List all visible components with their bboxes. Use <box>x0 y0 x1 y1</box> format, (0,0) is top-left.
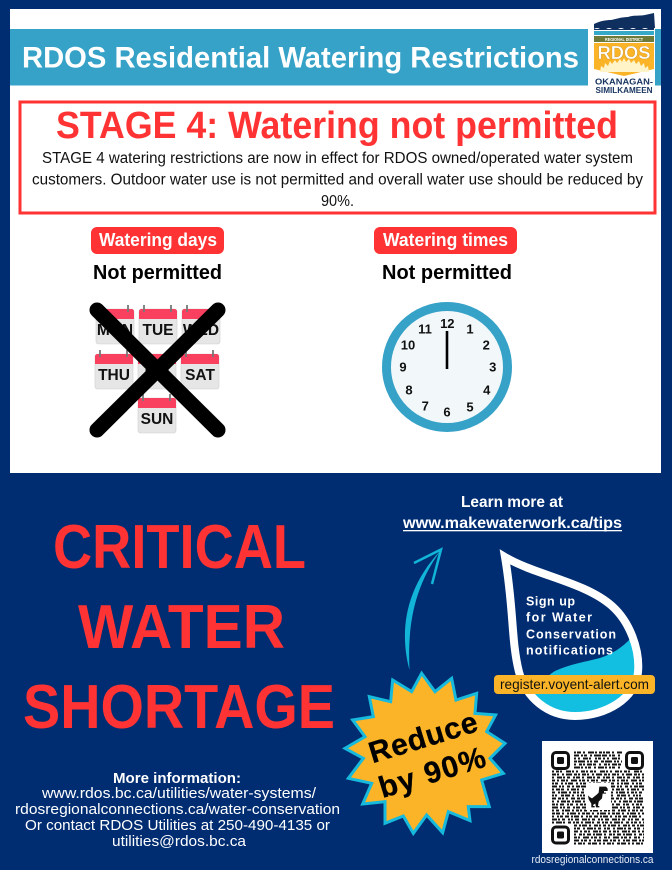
more information: More information: <box>113 771 241 787</box>
calendar: Saturday: SAT <box>185 367 215 384</box>
icon: clock at twelve: 3 <box>489 360 496 375</box>
QR caption: rdosregionalconnections.ca <box>532 854 654 866</box>
signup text: for Water <box>526 610 592 624</box>
calendar: Friday: FRI <box>145 367 169 384</box>
stage description <box>32 150 643 210</box>
icon: clock at twelve: 9 <box>399 360 407 375</box>
icon: clock at twelve <box>386 306 508 428</box>
starburst: reduce by 90%: by 90% <box>375 741 490 805</box>
stage description: 90%. <box>321 193 354 210</box>
icon: clock at twelve: 6 <box>443 405 451 420</box>
more information: www.rdos.bc.ca/utilities/water-systems/ <box>41 786 317 802</box>
learn more link: www.makewaterwork.ca/tips <box>402 515 622 532</box>
calendar: Sunday: SUN <box>141 411 173 428</box>
QR modules <box>552 752 644 844</box>
more information: rdosregionalconnections.ca/water-conservation <box>15 802 340 818</box>
critical water shortage headline: SHORTAGE <box>23 673 335 742</box>
logo: RDOS Okanagan-Similkameen <box>588 9 655 100</box>
icon: clock at twelve: 2 <box>483 338 490 353</box>
signup text: Sign up <box>526 594 575 608</box>
icon: clock at twelve: 1 <box>466 321 474 336</box>
water drop signup <box>505 557 638 716</box>
drop outline <box>505 557 638 716</box>
watering times status: Not permitted <box>382 262 512 284</box>
QR code <box>542 741 653 853</box>
register pill: register.voyent-alert.com <box>500 676 649 692</box>
logo: RDOS Okanagan-Similkameen: OKANAGAN- <box>595 78 653 86</box>
signup text: notifications <box>526 643 613 657</box>
signup text: Conservation <box>526 627 616 641</box>
critical water shortage headline: CRITICAL <box>53 513 306 582</box>
more information: utilities@rdos.bc.ca <box>112 834 247 850</box>
logo: RDOS Okanagan-Similkameen: REGIONAL DISTRICT <box>605 37 643 42</box>
icon: crossed out calendars <box>95 305 220 433</box>
icon: clock at twelve: 5 <box>466 399 474 414</box>
critical water shortage headline: WATER <box>78 593 285 662</box>
drop water fill <box>530 637 638 716</box>
calendar: Wednesday: WED <box>183 322 219 339</box>
calendar: Thursday: THU <box>98 367 130 384</box>
watering times badge: Watering times <box>383 230 508 250</box>
stage heading: STAGE 4: Watering not permitted <box>56 105 618 147</box>
logo: RDOS Okanagan-Similkameen: RDOS <box>598 43 650 63</box>
stage description: STAGE 4 watering restrictions are now in effect for RDOS owned/operated water system <box>42 150 633 167</box>
calendar: Monday: MON <box>97 322 133 339</box>
icon: clock at twelve: 12 <box>440 316 455 331</box>
more information <box>15 771 340 850</box>
icon: clock at twelve: 8 <box>405 382 413 397</box>
stage 4 notice box <box>20 102 655 213</box>
panel: restrictions <box>10 9 661 473</box>
icon: clock at twelve: 10 <box>401 338 415 353</box>
calendar: Tuesday: TUE <box>142 322 174 339</box>
starburst: reduce by 90%: Reduce <box>365 706 482 770</box>
watering days status: Not permitted <box>93 262 222 284</box>
learn more link <box>402 494 622 532</box>
title banner <box>10 29 661 86</box>
logo: RDOS Okanagan-Similkameen: SIMILKAMEEN <box>596 86 653 95</box>
QR finder patterns <box>552 752 642 843</box>
critical water shortage headline <box>23 513 335 742</box>
watering days badge: Watering days <box>99 230 217 250</box>
title: RDOS Residential Watering Restrictions <box>22 42 579 74</box>
icon: dinosaur <box>586 783 611 810</box>
starburst: reduce by 90% <box>345 673 505 833</box>
more information: Or contact RDOS Utilities at 250-490-4135 or <box>25 818 330 834</box>
drop body <box>505 557 638 716</box>
icon: clock at twelve: 7 <box>422 399 429 414</box>
watering times badge <box>374 227 517 254</box>
icon: black cross <box>97 310 218 430</box>
watering days badge <box>91 227 224 254</box>
icon: clock at twelve: 11 <box>418 321 432 336</box>
learn more link: Learn more at <box>461 494 563 511</box>
signup text <box>526 594 616 657</box>
stage description: customers. Outdoor water use is not permitted and overall water use should be reduced by <box>32 172 643 188</box>
icon: clock at twelve: 4 <box>483 382 491 397</box>
arrow <box>405 550 441 670</box>
